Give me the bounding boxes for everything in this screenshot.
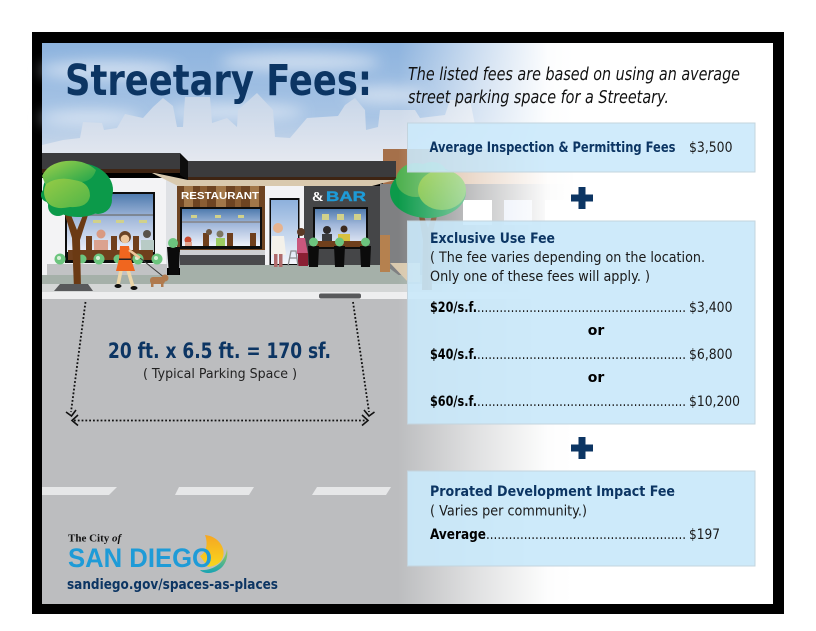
dog [150, 274, 168, 287]
bar planters [308, 238, 371, 267]
logo: City of San Diego: The City of [68, 532, 122, 544]
bar window [313, 207, 368, 249]
parking space dimensions: 20 ft. x 6.5 ft. = 170 sf. [108, 339, 331, 364]
restaurant sign: RESTAURANT [181, 190, 260, 202]
restaurant window [180, 207, 262, 249]
white fade overlay [398, 43, 574, 604]
planter box with shrubs [47, 254, 167, 275]
panel: exclusive use fee [408, 221, 755, 424]
fee row: average: Average [430, 527, 486, 543]
bar front: BAR [326, 188, 366, 204]
fee row: $20: $3,400 [689, 300, 732, 316]
door [270, 198, 300, 265]
people at door [271, 223, 308, 267]
fee row: average: $197 [689, 527, 720, 543]
panel: inspection and permitting fees: Average Inspection & Permitting Fees [430, 140, 676, 156]
storm drain [319, 294, 361, 298]
sky [42, 43, 773, 168]
panel: prorated development impact fee [408, 471, 755, 566]
panel: inspection and permitting fees [408, 123, 755, 172]
intro text: The listed fees are based on using an average [408, 65, 740, 85]
fee row: $40: $6,800 [689, 347, 732, 363]
background building at right [380, 149, 575, 284]
or: or [588, 323, 604, 339]
icon: logo swirl [200, 535, 227, 573]
intro text: street parking space for a Streetary. [408, 88, 669, 108]
panel: prorated development impact fee: ( Varies per community.) [430, 504, 587, 520]
fee row: $60: ........................................................ [477, 394, 686, 410]
lane dashes [42, 487, 391, 495]
fee row: $60: $60/s.f. [430, 394, 477, 410]
clouds [40, 53, 425, 126]
street scene illustration [40, 43, 773, 604]
panel: exclusive use fee: Only one of these fees will apply. ) [430, 269, 650, 285]
bar sign: & [312, 190, 324, 205]
intro text [408, 65, 740, 108]
city skyline [42, 93, 520, 165]
fee row: average: ..................................................... [486, 527, 686, 543]
storefront walls [42, 172, 402, 278]
fee row: $40: ........................................................ [477, 347, 686, 363]
tree left [41, 161, 113, 291]
logo: City of San Diego: SAN DIEGO [68, 543, 212, 573]
panel: prorated development impact fee: Prorated Development Impact Fee [430, 484, 675, 500]
woman walking a dog [114, 231, 168, 290]
sidewalk [42, 235, 582, 299]
fee row: $20: $20/s.f. [430, 300, 477, 316]
left window [65, 192, 155, 263]
parking space dimension arrows [66, 302, 374, 426]
tree right [390, 162, 466, 290]
icon: plus [571, 187, 593, 209]
roof [42, 153, 396, 180]
fee row: $20: ........................................................ [477, 300, 686, 316]
parking space dimensions: ( Typical Parking Space ) [143, 366, 297, 382]
panel: exclusive use fee: ( The fee varies depending on the location. [430, 250, 705, 266]
fee row: $40: $40/s.f. [430, 347, 477, 363]
logo: City of San Diego: sandiego.gov/spaces-as-places [67, 577, 278, 593]
road [42, 298, 582, 604]
title: Streetary Fees: [65, 56, 372, 106]
parking space dimensions [108, 339, 331, 382]
fee row: $60: $10,200 [689, 394, 740, 410]
bar front [312, 188, 368, 249]
icon: plus [571, 437, 593, 459]
panel: exclusive use fee: Exclusive Use Fee [430, 231, 555, 247]
or: or [588, 370, 604, 386]
panel: inspection and permitting fees: $3,500 [689, 140, 732, 156]
logo: City of San Diego [67, 532, 278, 593]
left planter [167, 238, 180, 275]
restaurant front [177, 186, 265, 265]
